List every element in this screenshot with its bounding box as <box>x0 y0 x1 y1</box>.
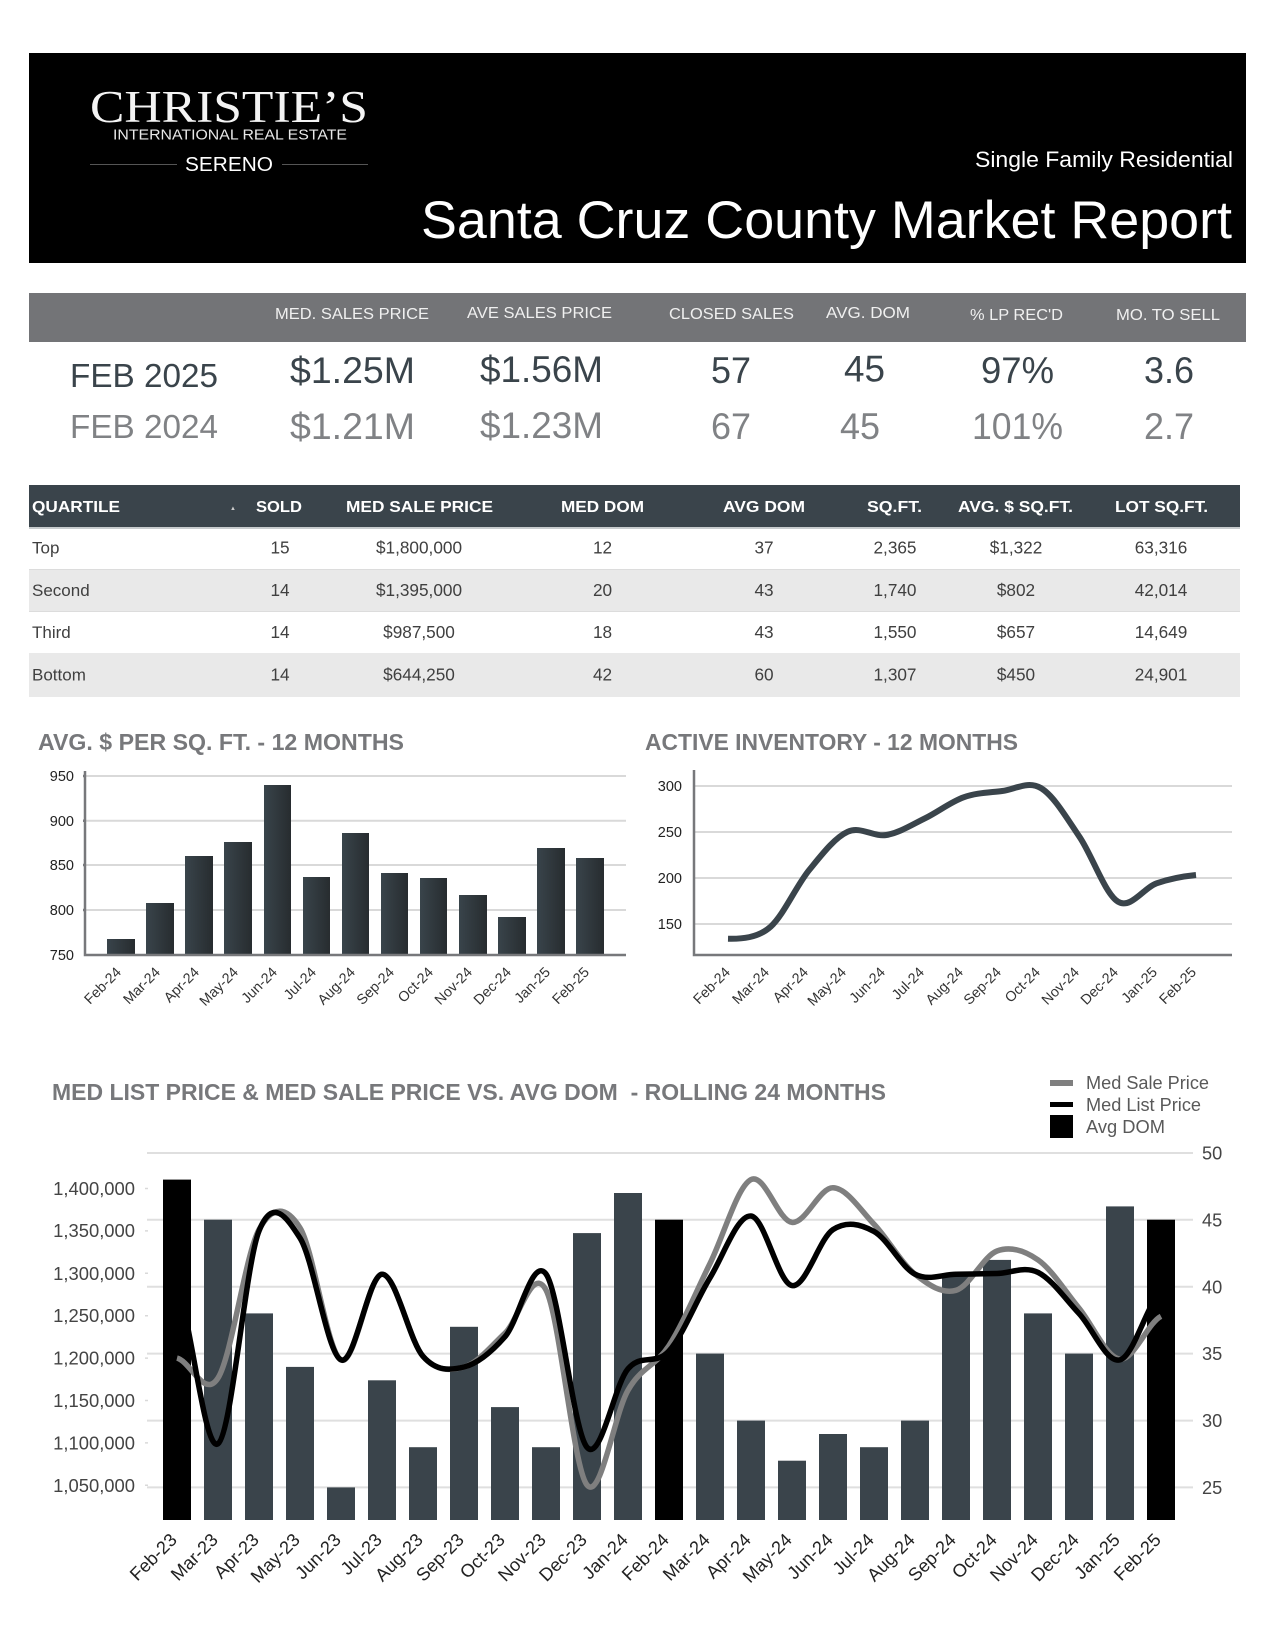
y axis labels: 900 <box>50 814 74 830</box>
row: Second: Second <box>32 581 90 600</box>
x axis labels: Jun-24 <box>847 964 889 1007</box>
x axis labels: Sep-24 <box>354 964 398 1008</box>
legend: Avg DOM <box>1086 1117 1165 1137</box>
x axis labels: Jul-24 <box>281 964 320 1003</box>
row: Second: $1,395,000 <box>376 580 462 600</box>
left y axis labels: 1,400,000 <box>53 1178 135 1199</box>
combo chart: price vs avg DOM <box>53 1144 1222 1587</box>
row: Top <box>29 529 1240 569</box>
x axis labels: Apr-24 <box>702 1530 755 1582</box>
x axis labels: Jun-24 <box>239 964 281 1007</box>
quartile table <box>29 485 1240 697</box>
left y axis labels: 1,200,000 <box>53 1348 135 1368</box>
Feb 2024 metrics row: $1.23M <box>480 405 603 446</box>
header banner <box>29 53 1246 263</box>
x axis labels: Mar-23 <box>167 1530 222 1585</box>
x axis labels: Sep-24 <box>961 964 1005 1008</box>
left y axis labels: 1,100,000 <box>53 1432 135 1454</box>
x axis labels: Jan-24 <box>578 1530 632 1583</box>
x axis labels: Oct-24 <box>395 964 437 1006</box>
Feb 2025 metrics row: $1.25M <box>290 350 415 391</box>
Feb 2024 metrics row: 45 <box>840 406 880 447</box>
x axis labels: Aug-24 <box>315 964 359 1008</box>
y axis labels: 200 <box>658 871 682 887</box>
x axis labels: Jul-24 <box>889 964 928 1003</box>
x axis labels: May-24 <box>197 964 242 1010</box>
med sale price line <box>177 1179 1161 1487</box>
x axis labels: Jun-24 <box>783 1530 837 1583</box>
x axis labels: Apr-24 <box>770 964 812 1006</box>
row: Bottom: 42 <box>593 664 612 684</box>
x axis labels: Apr-24 <box>161 964 203 1006</box>
row: Top: 2,365 <box>873 538 917 558</box>
right y axis labels <box>1202 1144 1222 1498</box>
x axis labels: Nov-24 <box>986 1530 1042 1585</box>
legend: Med Sale Price <box>1086 1073 1209 1093</box>
x axis labels: Nov-24 <box>432 964 476 1008</box>
right y axis labels: 40 <box>1202 1278 1222 1298</box>
x axis labels: Mar-24 <box>729 964 773 1008</box>
title: Santa Cruz County Market Report <box>421 191 1232 250</box>
row: Top: $1,800,000 <box>376 538 462 558</box>
x axis labels: Jul-24 <box>829 1530 878 1579</box>
bars <box>107 785 604 955</box>
left y axis labels: 1,250,000 <box>53 1305 135 1326</box>
key metrics header band: MO. TO SELL <box>1116 307 1220 324</box>
right y axis labels: 50 <box>1202 1144 1222 1164</box>
key metrics header band: CLOSED SALES <box>669 306 794 323</box>
x axis labels: Feb-25 <box>1110 1530 1165 1585</box>
x axis labels: Dec-23 <box>535 1530 591 1585</box>
table header: SQ.FT. <box>867 499 922 516</box>
table header: ▲ <box>230 506 236 512</box>
row: Bottom: $644,250 <box>383 664 455 684</box>
x axis labels: Feb-23 <box>126 1530 181 1585</box>
right y axis labels: 25 <box>1202 1478 1222 1498</box>
row: Bottom: 1,307 <box>873 664 917 684</box>
x axis labels: Mar-24 <box>659 1530 714 1585</box>
left y axis labels: 1,300,000 <box>53 1263 135 1284</box>
row: Top: 15 <box>270 538 290 558</box>
Feb 2024 metrics row: 67 <box>711 406 751 447</box>
x axis labels: Jun-23 <box>291 1530 345 1583</box>
row: Bottom: 14 <box>270 664 290 684</box>
Feb 2025 metrics row: 57 <box>711 350 751 391</box>
right y axis labels: 45 <box>1202 1210 1222 1230</box>
x axis labels <box>690 964 1200 1010</box>
row: Top: 12 <box>593 538 612 558</box>
row: Second: 20 <box>593 580 612 600</box>
logo: Christie's International Real Estate Sereno <box>90 82 368 176</box>
x axis labels: Dec-24 <box>1078 964 1122 1008</box>
y axis labels: 750 <box>50 948 74 964</box>
key metrics panel <box>29 293 1246 447</box>
x axis labels: Nov-24 <box>1039 964 1083 1008</box>
row: Third: 43 <box>754 622 774 642</box>
row: Second: $802 <box>997 580 1035 600</box>
x axis labels: Mar-24 <box>120 964 164 1008</box>
avg DOM bars <box>163 1180 1175 1520</box>
left axis ticks <box>145 1188 148 1485</box>
x axis labels: Feb-25 <box>1156 964 1200 1008</box>
table header <box>29 485 1240 529</box>
legend <box>1050 1073 1209 1138</box>
x axis labels: Sep-23 <box>412 1530 468 1585</box>
left y axis labels: 1,150,000 <box>53 1390 135 1411</box>
inventory line <box>728 785 1196 939</box>
table header: MED SALE PRICE <box>346 499 493 516</box>
table header: AVG DOM <box>723 499 805 516</box>
key metrics header band: % LP REC'D <box>970 307 1063 324</box>
row: Third: Third <box>32 623 71 642</box>
table header: QUARTILE <box>32 499 120 516</box>
med list price line <box>177 1212 1161 1449</box>
x axis labels: Feb-24 <box>618 1530 673 1585</box>
x axis labels: Dec-24 <box>1027 1530 1083 1585</box>
right y axis labels: 35 <box>1202 1344 1222 1364</box>
key metrics header band <box>29 293 1246 342</box>
x axis labels: Oct-24 <box>948 1530 1001 1582</box>
row: Third: $657 <box>997 622 1035 642</box>
Feb 2025 metrics row: FEB 2025 <box>70 358 218 395</box>
Feb 2025 metrics row: 45 <box>844 348 885 390</box>
logo: Christie's International Real Estate Sereno: INTERNATIONAL REAL ESTATE <box>113 126 347 144</box>
x axis labels: Oct-23 <box>456 1530 509 1582</box>
x axis labels: May-24 <box>739 1530 796 1587</box>
x axis labels: Jul-23 <box>337 1530 386 1579</box>
row: Third <box>29 611 1240 653</box>
heading: active inventory: ACTIVE INVENTORY - 12 MONTHS <box>645 729 1018 755</box>
Feb 2025 metrics row: $1.56M <box>480 349 603 390</box>
row: Third: 18 <box>593 622 612 642</box>
row: Bottom: 60 <box>754 664 774 684</box>
row: Top: 37 <box>754 538 774 558</box>
y axis labels <box>50 769 74 964</box>
left y axis labels: 1,350,000 <box>53 1220 135 1241</box>
logo: Christie's International Real Estate Sereno: CHRISTIE’S <box>90 82 368 132</box>
x axis labels: Feb-24 <box>690 964 734 1008</box>
heading: rolling 24 months: MED LIST PRICE & MED SALE PRICE VS. AVG DOM - ROLLING 24 MONTHS <box>52 1079 886 1105</box>
row: Second: 1,740 <box>873 580 917 600</box>
line chart: active inventory <box>658 770 1232 1010</box>
Feb 2024 metrics row: $1.21M <box>290 406 415 447</box>
left y axis labels <box>53 1178 135 1496</box>
key metrics header band: AVG. DOM <box>826 305 910 322</box>
key metrics header band: AVE SALES PRICE <box>467 305 612 322</box>
table header: LOT SQ.FT. <box>1115 499 1208 516</box>
Feb 2024 metrics row: 2.7 <box>1144 406 1194 447</box>
row: Second: 42,014 <box>1135 580 1188 600</box>
Feb 2025 metrics row: 3.6 <box>1144 350 1194 391</box>
table header: MED DOM <box>561 499 644 516</box>
x axis labels: Apr-23 <box>210 1530 263 1582</box>
x axis labels <box>126 1530 1165 1587</box>
row: Second: 14 <box>270 580 290 600</box>
y axis labels: 800 <box>50 903 74 919</box>
x axis labels <box>81 964 593 1010</box>
x axis labels: Aug-23 <box>371 1530 427 1585</box>
row: Top: 63,316 <box>1135 538 1187 558</box>
bar chart: avg $ per sq ft <box>50 769 626 1010</box>
right y axis labels: 30 <box>1202 1411 1222 1431</box>
table header: SOLD <box>256 499 302 516</box>
y axis labels <box>658 779 682 933</box>
row: Second: 43 <box>754 580 774 600</box>
y axis labels: 300 <box>658 779 682 795</box>
left y axis labels: 1,050,000 <box>53 1475 135 1496</box>
legend: Med List Price <box>1086 1095 1201 1115</box>
x axis labels: Dec-24 <box>471 964 515 1008</box>
x axis labels: Jan-25 <box>512 964 554 1007</box>
row: Bottom: $450 <box>997 664 1035 684</box>
x axis labels: May-23 <box>247 1530 304 1587</box>
x axis labels: Jan-25 <box>1070 1530 1124 1583</box>
x axis labels: Feb-24 <box>81 964 125 1008</box>
row: Top: Top <box>32 538 59 558</box>
Feb 2024 metrics row <box>70 405 1194 447</box>
row: Top: $1,322 <box>990 538 1042 558</box>
heading: avg price per sq ft: AVG. $ PER SQ. FT. - 12 MONTHS <box>38 729 404 755</box>
y axis labels: 850 <box>50 858 74 874</box>
row: Second <box>29 569 1240 612</box>
y axis labels: 250 <box>658 825 682 841</box>
row: Third: 14 <box>270 622 290 642</box>
Feb 2025 metrics row <box>70 348 1194 395</box>
y axis labels: 950 <box>50 769 74 785</box>
logo: Christie's International Real Estate Sereno: SERENO <box>185 154 273 176</box>
x axis labels: Jan-25 <box>1119 964 1161 1007</box>
key metrics header band: MED. SALES PRICE <box>275 306 429 323</box>
x axis labels: Sep-24 <box>904 1530 960 1585</box>
x axis labels: Feb-25 <box>549 964 593 1008</box>
x axis labels: Aug-24 <box>863 1530 919 1585</box>
row: Third: 1,550 <box>873 622 917 642</box>
Feb 2024 metrics row: 101% <box>972 406 1063 447</box>
Feb 2024 metrics row: FEB 2024 <box>70 409 218 446</box>
x axis labels: Aug-24 <box>923 964 967 1008</box>
x axis labels: Oct-24 <box>1002 964 1044 1006</box>
x axis labels: Nov-23 <box>494 1530 550 1585</box>
x axis labels: May-24 <box>805 964 850 1010</box>
row: Bottom <box>29 653 1240 697</box>
row: Bottom: Bottom <box>32 666 86 684</box>
row: Bottom: 24,901 <box>1135 664 1187 684</box>
subtitle: Single Family Residential <box>975 147 1233 172</box>
row: Third: $987,500 <box>383 622 455 642</box>
y axis labels: 150 <box>658 917 682 933</box>
Feb 2025 metrics row: 97% <box>981 350 1054 391</box>
table header: AVG. $ SQ.FT. <box>958 499 1073 516</box>
row: Third: 14,649 <box>1135 622 1187 642</box>
